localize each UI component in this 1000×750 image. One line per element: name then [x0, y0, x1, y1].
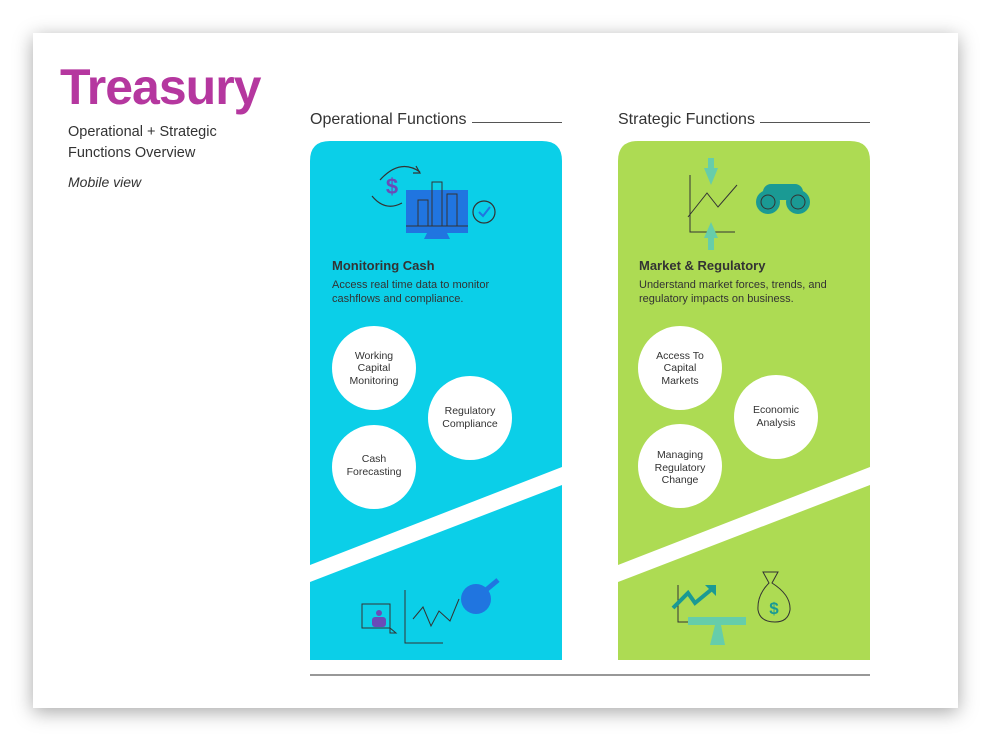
icon: chart with arrows and binoculars — [688, 158, 810, 250]
circle: regulatory compliance: Compliance — [442, 418, 498, 430]
heading: operational: Operational Functions — [310, 111, 467, 128]
circle: cash forecasting: Cash — [362, 453, 386, 465]
panel: operational — [310, 141, 562, 660]
circle: managing regulatory change — [638, 424, 722, 508]
circle: working capital: Capital — [358, 362, 390, 374]
circle: managing regulatory change: Managing — [657, 449, 703, 461]
text: monitoring description: Access real time data to monitor — [332, 279, 489, 291]
circle: cash forecasting: Forecasting — [347, 466, 402, 478]
circle: working capital: Monitoring — [349, 375, 399, 387]
circle: cash forecasting — [332, 425, 416, 509]
circle: access to capital markets: Markets — [661, 375, 699, 387]
circle: economic analysis: Analysis — [756, 417, 796, 429]
circle: access to capital markets — [638, 326, 722, 410]
circle: working capital — [332, 326, 416, 410]
circle: regulatory compliance: Regulatory — [445, 405, 496, 417]
icon: growth and money bag on scale: $ — [769, 599, 779, 618]
text: monitoring description: cashflows and compliance. — [332, 293, 463, 305]
circle: economic analysis — [734, 375, 818, 459]
heading: market & regulatory: Market & Regulatory — [639, 258, 766, 273]
heading: strategic: Strategic Functions — [618, 111, 755, 128]
subtitle — [68, 124, 217, 161]
text: market description: Understand market forces, trends, and — [639, 279, 827, 291]
circle: access to capital markets: Access To — [656, 350, 704, 362]
heading: monitoring cash: Monitoring Cash — [332, 258, 435, 273]
text: market description: regulatory impacts on business. — [639, 293, 794, 305]
circle: managing regulatory change: Regulatory — [655, 462, 706, 474]
icon: monitor with dollar — [372, 166, 495, 239]
circle: working capital: Working — [355, 350, 393, 362]
icon: chart with magnifier — [362, 580, 498, 643]
subtitle: Operational + Strategic — [68, 124, 217, 140]
mobile view note: Mobile view — [68, 174, 141, 190]
subtitle: Functions Overview — [68, 145, 195, 161]
title: Treasury — [60, 59, 260, 115]
icon: monitor with dollar: $ — [386, 174, 398, 199]
icon: growth and money bag on scale — [673, 572, 790, 645]
circle: access to capital markets: Capital — [664, 362, 696, 374]
circle: managing regulatory change: Change — [662, 474, 699, 486]
circle: economic analysis: Economic — [753, 404, 799, 416]
panel: strategic — [618, 141, 870, 660]
circle: regulatory compliance — [428, 376, 512, 460]
